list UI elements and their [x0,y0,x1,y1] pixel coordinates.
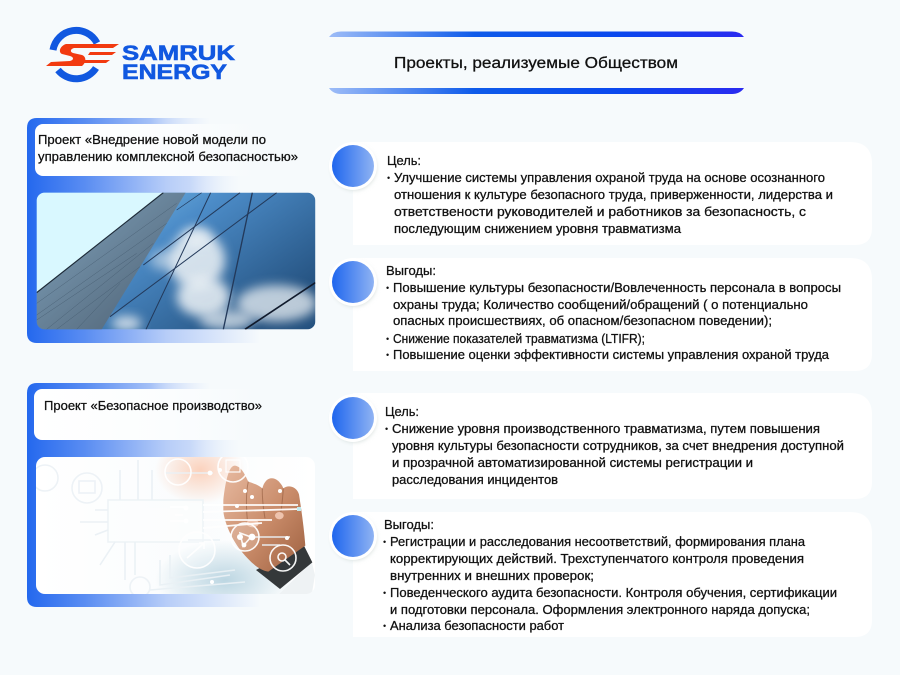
benefits text: Повышение культуры безопасности/Вовлеченность персонала в вопросы [393,281,841,295]
project 1 heading box [35,124,298,176]
logo wordmark: SAMRUK [122,42,235,65]
logo red wing [46,44,119,66]
logo: Samruk Energy [46,30,235,84]
benefits text: опасных происшествиях, об опасном/безопасном поведении); [393,314,772,328]
goal text: Улучшение системы управления охраной труда на основе осознанного [394,171,825,185]
frame gradient [27,383,260,607]
benefits text: Анализа безопасности работ [390,619,564,633]
panel: project 1 benefits [329,258,872,371]
goal text: уровня культуры безопасности сотрудников, за счет внедрения доступной [392,439,844,453]
benefits text: • [386,283,389,293]
benefits text: и подготовки персонала. Оформления электронного наряда допуска; [390,603,810,617]
benefits text: внутренних и внешних проверок; [390,569,594,583]
goal text: отношения к культуре безопасного труда, приверженности, лидерства и [394,188,833,202]
title banner [329,32,744,94]
photo: glass building and sky [37,193,317,331]
goal text: последующим снижением уровня травматизма [394,222,681,236]
benefits text [383,517,837,633]
benefits text: • [383,621,386,631]
project 1 heading box: управлению комплексной безопасностью» [38,149,298,164]
goal text: Цель: [387,153,421,168]
benefits text: Повышение оценки эффективности системы управления охраной труда [393,348,829,362]
benefits text: Поведенческого аудита безопасности. Контроля обучения, сертификации [390,586,837,600]
panel: project 1 goal [329,142,872,245]
benefits text: охраны труда; Количество сообщений/обращений ( о потенциально [393,298,808,312]
goal text: и прозрачной автоматизированной системы регистрации и [392,456,753,470]
panel: project 1 [27,118,317,343]
benefits text: • [383,537,386,547]
icon: blue disc [329,142,377,190]
title text: Проекты, реализуемые Обществом [394,55,678,72]
benefits text: Выгоды: [386,263,436,278]
panel: project 2 benefits [329,512,872,637]
icon: blue disc [329,394,377,442]
logo ring [53,30,97,79]
benefits text: • [386,334,389,344]
goal text [385,404,844,487]
goal text [387,153,833,236]
benefits text: Выгоды: [384,517,434,532]
hand [223,466,315,595]
project 2 heading box: Проект «Безопасное производство» [44,398,262,413]
goal text: • [385,424,388,434]
panel: project 2 [27,383,315,620]
logo wordmark [122,42,235,84]
goal text: Снижение уровня производственного травматизма, путем повышения [392,422,820,436]
frame gradient [27,118,260,343]
benefits text [386,263,841,362]
project 1 heading box: Проект «Внедрение новой модели по [38,132,266,147]
goal text: • [387,173,390,183]
panel: project 2 goal [329,393,872,499]
goal text: ответствености руководителей и работников за безопасность, с [394,205,806,219]
icon: blue disc [329,258,377,306]
benefits text: Снижение показателей травматизма (LTIFR); [393,332,645,346]
goal text: расследования инцидентов [392,473,558,487]
benefits text: • [383,588,386,598]
icon: blue disc [329,512,377,560]
benefits text: корректирующих действий. Трехступенчатого контроля проведения [390,552,804,566]
project 2 heading box [34,389,262,440]
photo: hand touching digital interface [36,457,315,594]
benefits text: • [386,350,389,360]
circuit lines and icons [80,452,300,590]
logo wordmark: ENERGY [122,61,227,84]
goal text: Цель: [385,404,419,419]
benefits text: Регистрации и расследования несоответствий, формирования плана [390,535,805,549]
